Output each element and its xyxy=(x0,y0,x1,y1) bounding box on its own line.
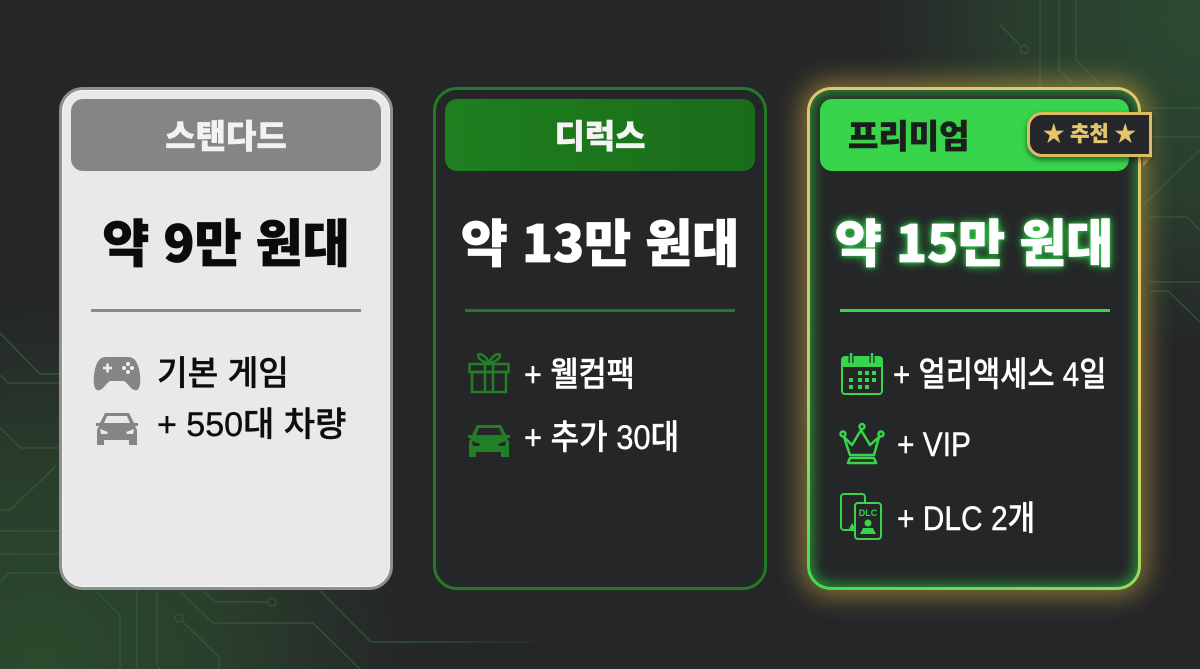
text: VIP: + VIP xyxy=(897,426,971,464)
icon: DLC cards xyxy=(840,493,882,540)
text: base game: 기본 게임 xyxy=(157,355,289,393)
text: 30 more cars: + 추가 30대 xyxy=(524,419,679,457)
text: 2 DLC: + DLC 2개 xyxy=(897,500,1035,538)
icon: gamepad xyxy=(94,357,140,390)
heading: deluxe xyxy=(445,99,755,171)
heading: standard: 스탠다드 xyxy=(165,110,287,158)
panel: deluxe xyxy=(433,87,767,590)
text: welcome pack: + 웰컴팩 xyxy=(524,356,635,394)
icon: DLC cards: DLC xyxy=(859,508,878,518)
text: early access: + 얼리액세스 4일 xyxy=(893,356,1106,394)
icon: calendar xyxy=(841,353,883,395)
badge: recommended xyxy=(1027,112,1152,157)
badge fold xyxy=(1143,157,1152,167)
price: standard: 약 9만 원대 xyxy=(102,203,350,277)
price: premium: 약 15만 원대 xyxy=(835,203,1113,277)
icon: crown xyxy=(839,422,885,464)
heading: standard xyxy=(71,99,381,171)
icon: car xyxy=(468,425,510,457)
heading: premium: 프리미엄 xyxy=(848,110,969,158)
text: 550 cars: + 550대 차량 xyxy=(157,406,346,444)
icon: car xyxy=(96,413,138,445)
heading: premium xyxy=(820,99,1129,171)
price: deluxe: 약 13만 원대 xyxy=(461,203,739,277)
heading: deluxe: 디럭스 xyxy=(554,110,646,158)
icon: gift xyxy=(468,352,510,394)
panel: premium xyxy=(784,64,1164,612)
badge: recommended: ★ 추천 ★ xyxy=(1043,118,1136,148)
panel: standard xyxy=(59,87,393,590)
